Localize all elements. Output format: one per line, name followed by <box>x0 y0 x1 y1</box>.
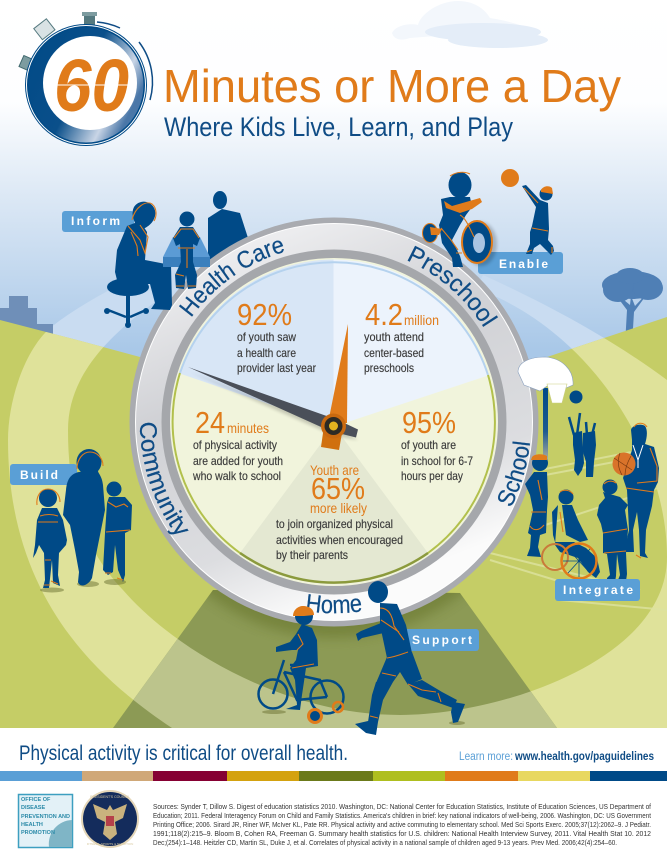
logo: ODPHP: OFFICE OF <box>21 797 51 803</box>
subtitle: Where Kids Live, Learn, and Play <box>164 112 513 142</box>
stat: school <box>401 405 473 483</box>
figure: child on table <box>173 212 200 289</box>
stat: preschool <box>364 297 439 375</box>
label: Enable <box>478 252 563 274</box>
clock hands <box>188 324 358 450</box>
stat: preschool: youth attend <box>364 330 424 344</box>
stat: preschool: 4.2 <box>365 297 403 332</box>
footer tagline: Physical activity is critical for overall health. <box>19 742 348 765</box>
label: Enable: Enable <box>499 257 548 271</box>
learn more link: Learn more: <box>459 751 513 763</box>
stat: home: Youth are <box>310 462 359 478</box>
label: Support: Support <box>412 633 472 647</box>
ring label: health care: Health Care <box>179 240 284 317</box>
figure: child throwing ball <box>501 169 554 255</box>
sector: preschool <box>334 260 488 426</box>
stat: health care: a health care <box>237 346 296 360</box>
label: Support <box>405 629 479 651</box>
footer background <box>0 728 667 867</box>
ring label: preschool: Preschool <box>408 246 498 327</box>
stat: home <box>276 462 403 562</box>
stat: home: by their parents <box>276 548 348 562</box>
label: Integrate: Integrate <box>563 583 633 597</box>
label: Build: Build <box>20 468 58 482</box>
health care adult man <box>208 191 248 265</box>
logo: ODPHP: HEALTH <box>21 822 43 828</box>
stat: health care: 92% <box>237 297 292 332</box>
title: Minutes or More a Day <box>163 60 621 112</box>
stat: community: of physical activity <box>193 438 277 452</box>
figure: coach with basketball <box>612 423 659 558</box>
figure: standing boy <box>525 454 548 557</box>
sources <box>153 802 652 847</box>
stat: school: of youth are <box>401 438 456 452</box>
stat: home: activities when encouraged <box>276 533 403 547</box>
stat: school: 95% <box>402 405 456 440</box>
logo: President's Council seal: FITNESS, SPORTS & NUTRITION <box>87 842 133 846</box>
sector: home <box>240 426 428 583</box>
sector: health care <box>180 260 334 426</box>
stat: home: 65% <box>311 471 365 506</box>
logo: President's Council seal <box>81 790 139 848</box>
label: Inform: Inform <box>71 214 120 228</box>
city silhouette <box>0 296 53 337</box>
stat: preschool: million <box>404 312 439 328</box>
figure: mother and children <box>33 449 132 592</box>
logo: ODPHP <box>18 794 72 848</box>
label: Build <box>10 464 77 485</box>
runner foot over footer <box>355 721 378 735</box>
logo: President's Council seal: PRESIDENT'S COUNCIL <box>90 795 130 799</box>
figure: child on tricycle <box>422 172 497 267</box>
sky light band <box>53 278 604 348</box>
figure: child on bike <box>258 606 344 722</box>
figure: basketball hoop <box>518 357 582 460</box>
figure: exam table <box>163 237 210 267</box>
stat: home: to join organized physical <box>276 517 393 531</box>
stat: school: in school for 6-7 <box>401 454 473 468</box>
stopwatch digits: 60 <box>54 44 129 127</box>
colour band <box>0 771 667 781</box>
stat: health care: provider last year <box>237 361 316 375</box>
figure: girl from behind <box>597 480 628 582</box>
logo: ODPHP: PROMOTION <box>21 830 55 836</box>
stat: community: are added for youth <box>193 454 283 468</box>
stat: community: who walk to school <box>192 469 281 483</box>
stat: community: minutes <box>227 420 269 436</box>
clock dial <box>130 218 538 626</box>
stat: preschool: preschools <box>364 361 414 375</box>
figure: wheelchair athlete <box>542 490 600 578</box>
tree <box>602 268 663 345</box>
stat: home: more likely <box>310 500 367 516</box>
logo: ODPHP: PREVENTION AND <box>21 814 70 820</box>
clouds <box>392 1 548 48</box>
stat: preschool: center-based <box>364 346 424 360</box>
stat: community: 24 <box>195 405 225 440</box>
figure: jumping kids <box>569 413 596 477</box>
logo: ODPHP: DISEASE <box>21 805 45 811</box>
label: Integrate <box>555 579 640 601</box>
stat: community <box>192 405 283 483</box>
stat: health care <box>237 297 316 375</box>
stopwatch icon <box>19 12 153 146</box>
green hills <box>0 317 667 728</box>
ring label: community: Community <box>140 422 189 534</box>
ring label: school: School <box>498 441 530 506</box>
stat: health care: of youth saw <box>237 330 296 344</box>
label: Inform <box>62 211 134 232</box>
learn more link <box>459 751 654 763</box>
figure: running man <box>356 581 465 725</box>
figure: doctor on stool <box>104 202 172 328</box>
stat: school: hours per day <box>401 469 463 483</box>
ring label: home: Home <box>307 594 362 614</box>
home light beam <box>113 590 557 728</box>
